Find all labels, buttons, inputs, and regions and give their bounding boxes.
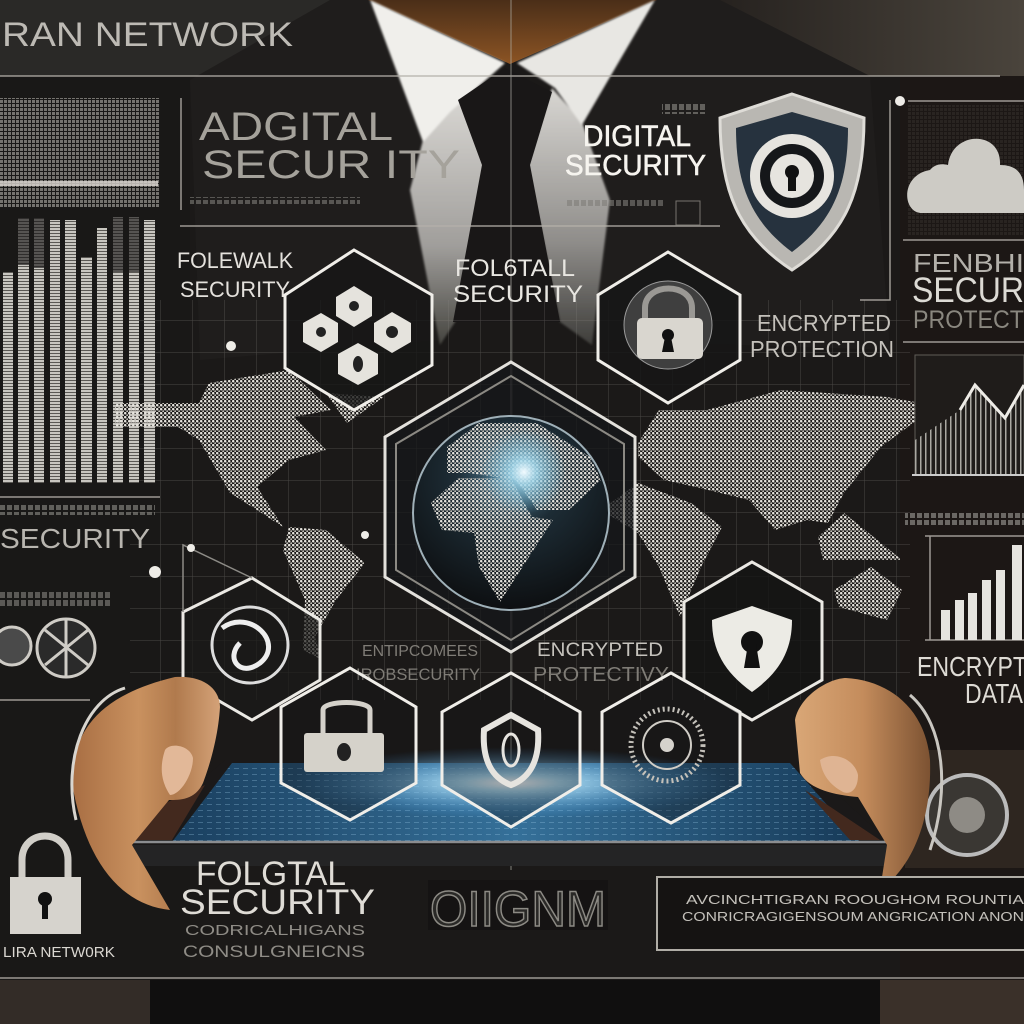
heading: folgtal security — [180, 855, 375, 922]
icons: bottom middle glyph strip: OIIGNM — [430, 881, 606, 937]
text block: small captions — [190, 102, 706, 225]
icon: seal right — [905, 750, 1024, 868]
label: folgtall security: SECURITY — [453, 281, 583, 308]
heading: folgtal security: SECURITY — [180, 883, 375, 922]
label: muted security: IROBSECURITY — [356, 665, 480, 684]
heading: digital security — [565, 120, 706, 182]
shirt — [370, 0, 655, 345]
heading: digital security: DIGITAL — [583, 120, 691, 153]
panel: right text — [912, 248, 1024, 334]
text block: consultations: CONSULGNEICNS — [183, 942, 365, 961]
label: folgtall security: FOL6TALL — [455, 255, 575, 282]
right chart: mountain line — [912, 355, 1024, 475]
suit jacket — [190, 0, 890, 360]
label: folewalk security: SECURITY — [180, 277, 290, 302]
heading: a digital security — [199, 105, 460, 187]
text block: over right bars — [905, 513, 1024, 525]
panel: top-left data block — [0, 98, 160, 207]
callout: bottom right text box: AVCINCHTIGRAN ROOUGHOM ROUNTIA — [686, 892, 1024, 907]
icon hexagon: padlock — [598, 252, 740, 403]
label: folgtall security — [453, 255, 583, 308]
neck — [368, 0, 657, 64]
left panel label: security: SECURITY — [0, 523, 150, 554]
label: encrypted protection: PROTECTION — [750, 336, 894, 362]
text block: consultations: CODRICALHIGANS — [185, 922, 365, 939]
heading: a digital security: SECUR ITY — [202, 143, 460, 187]
text block: over security label — [0, 505, 155, 515]
text block: consultations — [183, 922, 365, 961]
icon hexagon: central globe — [385, 362, 635, 652]
label: encrypt data — [917, 651, 1024, 709]
icons: left circles — [0, 618, 95, 677]
icon: padlock bottom left — [10, 836, 81, 934]
right bar chart — [941, 545, 1022, 640]
text block: left small — [0, 590, 112, 608]
world map — [115, 370, 960, 660]
icon hexagon: keyhole shield — [684, 562, 822, 720]
icon hexagon: firewall nodes — [285, 250, 432, 410]
globe sphere — [413, 416, 609, 610]
glow dots — [149, 96, 905, 578]
grid — [130, 300, 910, 700]
label: folewalk security: FOLEWALK — [177, 248, 293, 273]
icon: shield — [720, 94, 864, 270]
label: muted security — [356, 643, 480, 684]
label: encrypted protection centre — [533, 640, 669, 686]
hand: left — [72, 677, 220, 910]
heading: digital security: SECURITY — [565, 150, 706, 182]
callout: bottom right text box — [657, 877, 1024, 950]
globe highlight — [482, 430, 566, 514]
label: muted security: ENTIPCOMEES — [362, 643, 478, 660]
icon: cloud — [907, 139, 1024, 213]
label: lira network: LIRA NETW0RK — [3, 944, 115, 961]
icon hexagons: bottom row — [281, 668, 740, 827]
heading: a digital security: ADGITAL — [199, 105, 393, 149]
label: folewalk security — [177, 248, 293, 302]
heading: folgtal security: FOLGTAL — [196, 855, 346, 893]
label: encrypted protection: ENCRYPTED — [757, 310, 891, 336]
bar chart: left — [3, 217, 155, 483]
panel: right text: FENBHI — [913, 248, 1024, 278]
label: encrypted protection centre: PROTECTIVY — [533, 664, 669, 686]
tablet — [132, 747, 887, 866]
label: encrypted protection — [750, 310, 894, 362]
hand: right — [795, 678, 942, 890]
callout: bottom right text box: CONRICRAGIGENSOUM ANGRICATION ANON — [682, 909, 1024, 924]
heading: RAN network: RAN NETWORK — [2, 16, 293, 54]
tie — [453, 68, 560, 322]
label: encrypted protection centre: ENCRYPTED — [537, 640, 663, 661]
panel: cloud backdrop — [908, 105, 1024, 235]
globe continents — [431, 423, 601, 602]
icon hexagon: swirl — [183, 545, 320, 720]
